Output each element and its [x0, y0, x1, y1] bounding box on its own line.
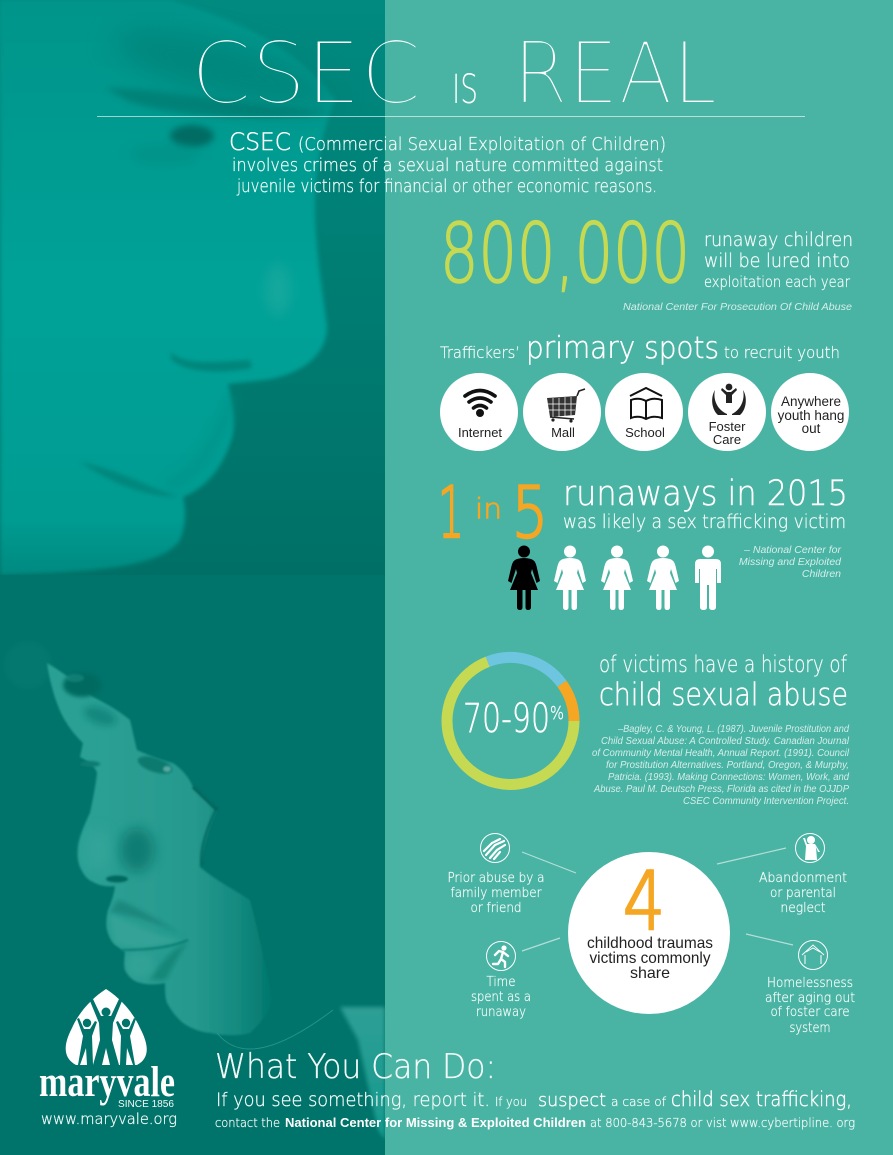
- donut chart: 70-90%: [447, 657, 574, 784]
- source: national center: – National Center for: [743, 544, 841, 556]
- stat: 1 in 5: runaways in 2015: [563, 474, 848, 514]
- heading: child sexual abuse: [599, 652, 848, 713]
- source: national center: Children: [802, 568, 841, 580]
- recruiting spots: anywhere: Anywhere: [781, 394, 841, 409]
- intro text block: juvenile victims for financial or other economic reasons.: [236, 177, 657, 197]
- citation text: CSEC Community Intervention Project.: [683, 796, 849, 807]
- donut chart: 70-90%: 70-90: [463, 696, 550, 742]
- recruiting spots: internet: Internet: [458, 425, 502, 440]
- center circle: 4 childhood traumas: share: [630, 965, 670, 982]
- title: [191, 24, 717, 124]
- call to action: what you can do: suspect: [538, 1090, 606, 1111]
- heading: primary spots: primary spots: [526, 331, 719, 366]
- call to action: what you can do: If you see something, report it.: [216, 1089, 490, 1111]
- title: IS: [452, 67, 478, 113]
- trauma: homelessness: system: [790, 1020, 830, 1036]
- recruiting spots: mall: Mall: [551, 425, 575, 440]
- citation text: for Prostitution Alternatives. Portland, Oregon, & Murphy,: [606, 760, 849, 771]
- stat: 1 in 5: [438, 472, 848, 554]
- trauma: homelessness: [765, 940, 855, 1036]
- photo: upper face: [0, 0, 385, 575]
- logo: maryvale: www.maryvale.org: [41, 1110, 177, 1128]
- trauma: time as a runaway: spent as a: [471, 989, 531, 1005]
- trauma: abandonment: Abandonment: [759, 870, 847, 886]
- right teal panel: [385, 0, 893, 1155]
- photo: lower face: [0, 575, 385, 1155]
- trauma: prior abuse: or friend: [470, 900, 522, 916]
- call to action: what you can do: a case of: [611, 1094, 667, 1109]
- source: national center: [739, 544, 842, 580]
- call to action: what you can do: at 800-843-5678 or vist www.cybertipline. org: [590, 1115, 855, 1130]
- stat: 800,000 runaways: will be lured into: [704, 251, 850, 272]
- call to action: what you can do: National Center for Missing & Exploited Children: [285, 1115, 586, 1130]
- cheek hair strand: [201, 808, 217, 866]
- heading: primary spots: to recruit youth: [724, 343, 840, 362]
- call to action: what you can do: If you: [495, 1094, 527, 1109]
- recruiting spots: anywhere: out: [802, 421, 821, 436]
- stat: 1 in 5: 1: [438, 472, 464, 554]
- trauma: abandonment: or parental: [770, 885, 836, 901]
- heading: primary spots: Traffickers’: [440, 343, 520, 362]
- stat: 1 in 5: was likely a sex trafficking victim: [563, 512, 846, 533]
- icon: white man: [695, 546, 721, 610]
- citation text: –Bagley, C. & Young, L. (1987). Juvenile Prostitution and: [617, 724, 849, 735]
- trauma: abandonment: neglect: [780, 900, 826, 916]
- trauma: time as a runaway: Time: [486, 974, 516, 990]
- trauma: homelessness: of foster care: [770, 1004, 850, 1020]
- icon: black woman: [508, 546, 540, 610]
- citation text: Abuse. Paul M. Deutsch Press, Florida as cited in the OJJDP: [593, 784, 849, 795]
- heading: primary spots: [440, 331, 840, 366]
- neck patch: [340, 1007, 385, 1140]
- recruiting spots: anywhere: [771, 373, 849, 451]
- recruiting spots: anywhere: youth hang: [778, 408, 844, 423]
- icon: hands: [480, 834, 510, 862]
- trauma: homelessness: after aging out: [765, 990, 855, 1006]
- citation text: Child Sexual Abuse: A Controlled Study. Canadian Journal: [601, 736, 850, 747]
- recruiting spots: school: [605, 373, 683, 451]
- recruiting spots: mall: [523, 373, 601, 451]
- lips: [110, 900, 170, 929]
- connector lines: [522, 848, 793, 951]
- trauma: prior abuse: [448, 834, 544, 916]
- call to action: what you can do: [215, 1047, 855, 1130]
- donut chart: 70-90%: %: [550, 703, 564, 724]
- stat: 800,000 runaways: exploitation each year: [704, 273, 851, 291]
- center circle: 4 childhood traumas: victims commonly: [590, 950, 710, 967]
- trauma: abandonment: [759, 834, 847, 916]
- icon: book under roof: [630, 388, 662, 419]
- icon: runner: [486, 942, 516, 970]
- icon: child: [796, 834, 824, 862]
- title: CSEC: [191, 24, 421, 124]
- icon: house: [798, 940, 828, 970]
- icon: shopping cart: [547, 389, 585, 423]
- trauma: time as a runaway: runaway: [476, 1004, 526, 1020]
- eye: [137, 756, 173, 774]
- intro text block: CSEC: [229, 128, 291, 156]
- icon: white woman: [647, 546, 679, 610]
- stat: 800,000 runaways: 800,000: [440, 207, 690, 302]
- logo: maryvale: SINCE 1856: [118, 1099, 174, 1110]
- center circle: 4 childhood traumas: [568, 852, 730, 1014]
- stat: 1 in 5: 5: [512, 472, 548, 554]
- icon: hands holding child: [712, 384, 746, 415]
- intro text block: (Commercial Sexual Exploitation of Children): [298, 134, 666, 155]
- stat: 1 in 5: in: [475, 492, 502, 525]
- curl: [63, 673, 101, 697]
- call to action: what you can do: contact the: [215, 1115, 280, 1130]
- center circle: 4 childhood traumas: 4: [623, 855, 665, 948]
- nose shadow: [120, 828, 154, 872]
- center circle: 4 childhood traumas: childhood traumas: [587, 935, 713, 952]
- stat: 800,000 runaways: National Center For Prosecution Of Child Abuse: [623, 302, 852, 313]
- title: REAL: [513, 24, 717, 124]
- icon: wifi: [465, 390, 495, 415]
- call to action: what you can do: child sex trafficking,: [671, 1087, 852, 1111]
- stat: 800,000 runaways: runaway children: [704, 230, 853, 251]
- icon: white woman: [601, 546, 633, 610]
- logo mark: [66, 989, 147, 1065]
- pictogram: five people: [508, 546, 721, 610]
- citation text: [592, 724, 850, 807]
- necklace: [217, 1010, 333, 1049]
- recruiting spots: school: School: [625, 425, 665, 440]
- recruiting spots: internet: [440, 373, 518, 451]
- recruiting spots: foster care: Foster: [709, 419, 746, 434]
- citation text: Patricia. (1993). Making Connections: Women, Work, and: [608, 772, 849, 783]
- intro text block: [229, 128, 666, 197]
- icon: white woman: [554, 546, 586, 610]
- heading: child sexual abuse: child sexual abuse: [599, 677, 848, 713]
- recruiting spots: foster care: Care: [713, 432, 741, 447]
- trauma: prior abuse: Prior abuse by a: [448, 870, 544, 886]
- call to action: what you can do: What You Can Do:: [215, 1047, 496, 1087]
- logo: maryvale: maryvale: [39, 1059, 175, 1106]
- source: national center: Missing and Exploited: [739, 556, 842, 568]
- recruiting spots: foster care: [688, 373, 766, 451]
- trauma: time as a runaway: [471, 942, 531, 1020]
- logo: maryvale: [39, 989, 177, 1128]
- intro text block: involves crimes of a sexual nature committed against: [232, 156, 663, 176]
- hair texture at left: [4, 641, 52, 689]
- trauma: prior abuse: family member: [450, 885, 542, 901]
- trauma: homelessness: Homelessness: [767, 975, 853, 991]
- citation text: of Community Mental Health, Annual Report. (1991). Council: [592, 748, 850, 759]
